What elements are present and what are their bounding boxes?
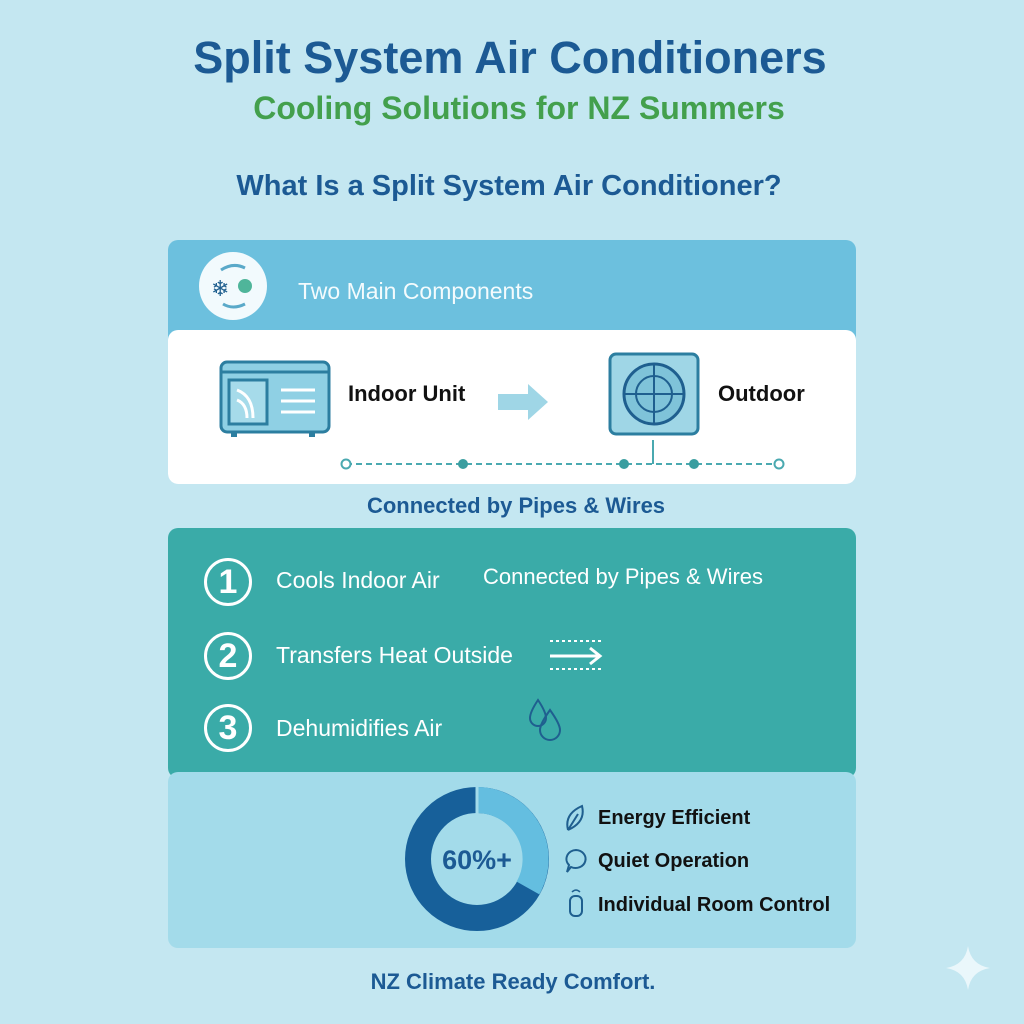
step 2: 2 <box>219 637 237 675</box>
step 3: 3 <box>219 709 237 747</box>
icon: snow sun cycle: ❄ <box>211 276 229 301</box>
icon: outdoor unit <box>608 352 700 436</box>
step 3 <box>204 704 442 752</box>
icon: water drops <box>529 698 561 741</box>
benefit list <box>565 804 830 917</box>
benefit list: Quiet Operation <box>598 850 749 872</box>
arrow <box>550 640 602 670</box>
section heading: What Is a Split System Air Conditioner? <box>236 170 782 202</box>
benefit list: Energy Efficient <box>598 807 750 829</box>
subtitle: Cooling Solutions for NZ Summers <box>253 90 785 126</box>
step 1 <box>204 558 440 606</box>
step 3: Dehumidifies Air <box>276 715 442 741</box>
panel header text: Two Main Components <box>298 278 533 304</box>
step 2 <box>204 632 513 680</box>
icon: sparkle <box>946 946 990 990</box>
panel: benefits <box>168 772 856 948</box>
icon: indoor unit <box>220 360 330 437</box>
label: indoor unit: Indoor Unit <box>348 381 465 406</box>
donut chart 60%+: 60%+ <box>442 845 512 875</box>
panel: two main components <box>168 240 856 484</box>
label: outdoor: Outdoor <box>718 381 805 406</box>
footer: NZ Climate Ready Comfort. <box>371 969 655 994</box>
benefit list: Individual Room Control <box>598 894 830 916</box>
icon: snow sun cycle <box>199 252 267 320</box>
icon: remote <box>569 889 583 917</box>
white body <box>168 330 856 484</box>
connection line <box>340 440 784 470</box>
panel: functions <box>168 528 856 778</box>
step 2: Transfers Heat Outside <box>276 642 513 668</box>
icon: leaf <box>566 804 584 831</box>
step 1: 1 <box>219 563 237 601</box>
icon: speech bubble <box>565 849 587 873</box>
donut chart 60%+ <box>405 787 549 931</box>
arrow <box>498 384 548 420</box>
title: Split System Air Conditioners <box>193 32 827 83</box>
text: connected: Connected by Pipes & Wires <box>483 564 763 589</box>
caption: connected: Connected by Pipes & Wires <box>367 493 665 518</box>
step 1: Cools Indoor Air <box>276 567 440 593</box>
